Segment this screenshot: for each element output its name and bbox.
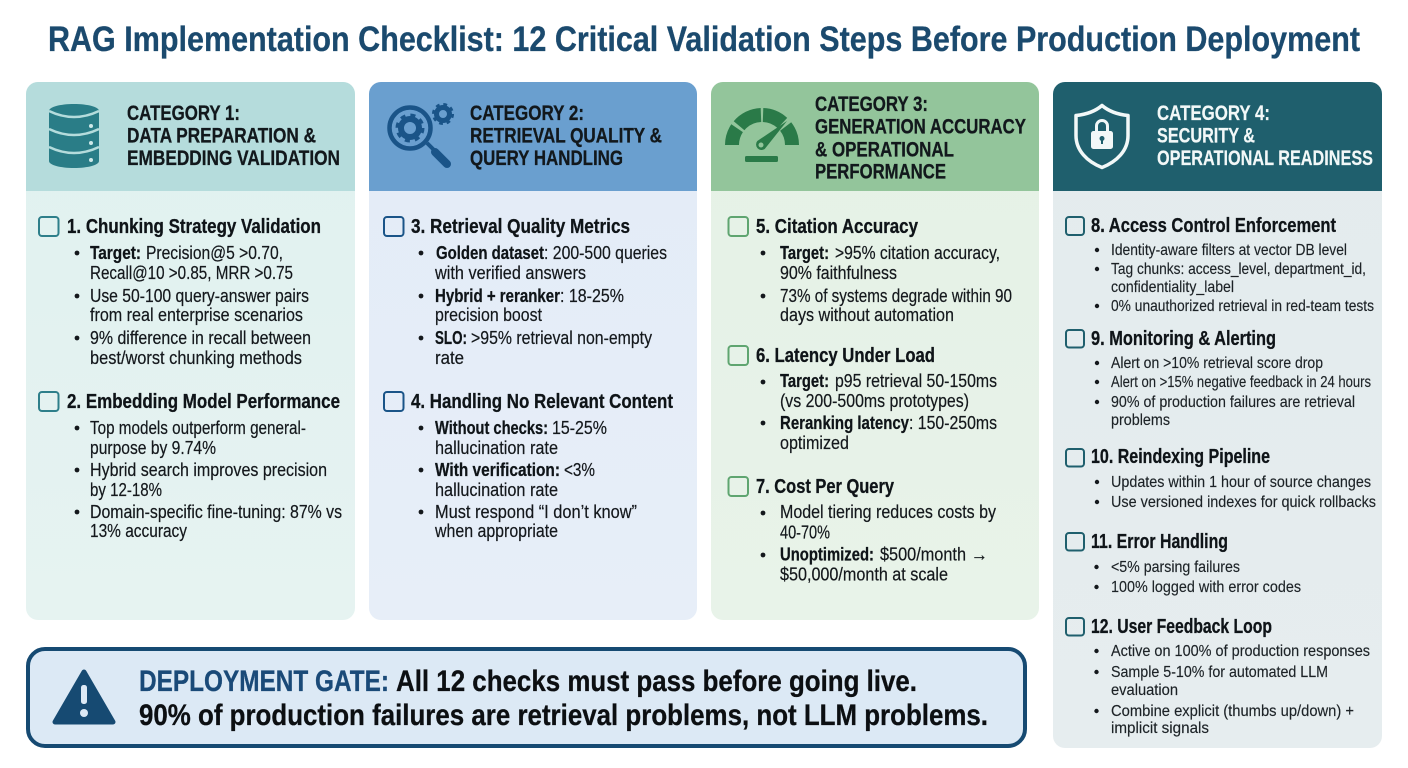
item bullets: : 18-25% — [560, 286, 624, 306]
icon: warning triangle — [55, 672, 113, 722]
item 1 — [39, 216, 321, 368]
item bullets: Reranking latency — [780, 413, 909, 433]
checkbox — [1066, 533, 1084, 550]
item bullets — [1094, 643, 1370, 737]
checkbox — [1066, 217, 1084, 235]
item heading: 2. Embedding Model Performance — [67, 391, 340, 413]
item bullets: precision boost — [435, 305, 542, 325]
callout text — [139, 665, 988, 732]
checkbox — [39, 392, 58, 411]
item bullets — [761, 502, 996, 584]
item 9 — [1066, 328, 1371, 429]
item bullets: Updates within 1 hour of source changes — [1111, 474, 1371, 491]
item bullets — [761, 243, 1012, 325]
item bullets: with verified answers — [434, 263, 586, 283]
item bullets: Target: — [90, 243, 141, 263]
checkbox — [1066, 449, 1084, 466]
item bullets: <5% parsing failures — [1111, 559, 1240, 576]
item bullets: 100% logged with error codes — [1111, 579, 1301, 596]
item bullets: hallucination rate — [435, 438, 558, 458]
item bullets: $50,000/month at scale — [780, 564, 948, 584]
item bullets: : 200-500 queries — [544, 243, 667, 263]
item bullets: rate — [435, 348, 464, 368]
item bullets — [1095, 242, 1374, 315]
item bullets: Sample 5-10% for automated LLM — [1111, 664, 1328, 681]
heading: category 4: SECURITY & — [1157, 124, 1255, 148]
item bullets: SLO: — [435, 328, 467, 348]
heading: category 3: & OPERATIONAL — [815, 138, 954, 162]
item bullets: Domain-specific fine-tuning: 87% vs — [90, 502, 342, 522]
item bullets: >95% citation accuracy, — [835, 243, 1000, 263]
item bullets: 90% faithfulness — [780, 263, 897, 283]
item bullets: → — [971, 544, 988, 564]
heading: category 2: RETRIEVAL QUALITY & — [470, 124, 662, 148]
item bullets: hallucination rate — [435, 480, 558, 500]
item 5 — [728, 216, 1012, 325]
item bullets: by 12-18% — [90, 480, 162, 500]
item 7 — [728, 476, 996, 584]
item bullets: 13% accuracy — [90, 521, 187, 541]
checkbox — [384, 392, 404, 411]
item bullets — [419, 418, 637, 541]
item heading: 5. Citation Accuracy — [756, 216, 919, 238]
item bullets: Active on 100% of production responses — [1111, 643, 1370, 660]
item bullets: 73% of systems degrade within 90 — [780, 286, 1012, 306]
checkbox — [384, 217, 404, 236]
item bullets: Use versioned indexes for quick rollbacks — [1111, 494, 1376, 511]
item 8 — [1066, 215, 1374, 315]
item bullets: <3% — [564, 460, 595, 480]
item bullets: when appropriate — [434, 521, 558, 541]
item 2 — [39, 391, 342, 541]
item bullets: Target: — [780, 371, 829, 391]
item bullets: Model tiering reduces costs by — [780, 502, 996, 522]
heading: category 4: CATEGORY 4: — [1157, 102, 1270, 125]
item bullets — [1094, 559, 1301, 596]
item bullets — [75, 418, 342, 541]
heading: category 1: CATEGORY 1: — [127, 102, 240, 125]
heading: category 1: DATA PREPARATION & — [127, 124, 316, 148]
item bullets: 0% unauthorized retrieval in red-team tests — [1111, 298, 1374, 315]
item 10 — [1066, 446, 1376, 511]
panel: category 2 retrieval quality — [369, 82, 697, 620]
item bullets: With verification: — [435, 460, 560, 480]
icon: magnifier with gears — [390, 104, 453, 164]
checkbox — [1066, 618, 1084, 636]
checkbox — [1066, 330, 1084, 348]
item bullets: implicit signals — [1111, 720, 1209, 737]
heading: category 3: PERFORMANCE — [815, 160, 946, 184]
checkbox — [728, 477, 748, 496]
item bullets: Alert on >10% retrieval score drop — [1111, 355, 1323, 372]
heading: category 1 — [127, 102, 340, 170]
heading: category 4 — [1157, 102, 1373, 170]
item 6 — [728, 345, 997, 453]
item bullets: Hybrid + reranker — [435, 286, 560, 306]
icon: speedometer gauge — [725, 108, 799, 162]
item heading: 11. Error Handling — [1091, 531, 1228, 553]
callout: deployment gate — [28, 649, 1025, 746]
panel: category 3 generation accuracy — [711, 82, 1039, 620]
item bullets: Precision@5 >0.70, — [146, 243, 283, 263]
item heading: 3. Retrieval Quality Metrics — [411, 216, 630, 238]
heading: category 3: CATEGORY 3: — [815, 93, 928, 116]
item bullets: 40-70% — [780, 522, 830, 542]
item bullets — [419, 243, 667, 368]
item heading: 12. User Feedback Loop — [1091, 616, 1272, 638]
item heading: 9. Monitoring & Alerting — [1091, 328, 1276, 350]
heading: category 2: QUERY HANDLING — [470, 147, 623, 170]
item bullets: evaluation — [1111, 682, 1178, 699]
item bullets: Hybrid search improves precision — [90, 460, 327, 480]
item bullets: Unoptimized: — [780, 544, 874, 564]
item bullets: >95% retrieval non-empty — [471, 328, 652, 348]
item bullets — [1095, 355, 1371, 429]
header: category 2 — [369, 82, 697, 191]
item bullets: Identity-aware filters at vector DB level — [1111, 242, 1347, 259]
item 4 — [384, 391, 673, 541]
item bullets: Without checks: — [435, 418, 548, 438]
item bullets: Golden dataset — [436, 243, 544, 263]
item bullets: Target: — [780, 243, 829, 263]
item bullets: 9% difference in recall between — [90, 328, 311, 348]
heading: category 3 — [815, 93, 1026, 184]
header: category 1 — [26, 82, 355, 191]
heading: category 2 — [470, 102, 662, 170]
item bullets: days without automation — [780, 305, 954, 325]
callout text: DEPLOYMENT GATE: — [139, 665, 389, 698]
item bullets — [761, 371, 997, 453]
header: category 3 — [711, 82, 1039, 191]
item 3 — [384, 216, 667, 368]
panel: category 1 data preparation — [26, 82, 355, 620]
item heading: 4. Handling No Relevant Content — [411, 391, 673, 413]
checkbox — [728, 346, 748, 365]
item bullets — [1095, 474, 1376, 511]
callout text: 90% of production failures are retrieval problems, not LLM problems. — [139, 699, 988, 732]
item bullets: Combine explicit (thumbs up/down) + — [1111, 703, 1354, 720]
header: category 4 — [1053, 82, 1382, 191]
item bullets: Top models outperform general- — [90, 418, 306, 438]
item bullets — [75, 243, 311, 368]
heading: category 3: GENERATION ACCURACY — [815, 116, 1026, 138]
item bullets: from real enterprise scenarios — [90, 305, 303, 325]
item heading: 1. Chunking Strategy Validation — [67, 216, 321, 238]
item bullets: 15-25% — [552, 418, 607, 438]
panel: category 4 security — [1053, 82, 1382, 748]
checkbox — [39, 217, 58, 236]
item heading: 10. Reindexing Pipeline — [1091, 446, 1270, 468]
item heading: 8. Access Control Enforcement — [1091, 215, 1336, 237]
callout text: All 12 checks must pass before going live. — [396, 665, 917, 698]
item bullets: 90% of production failures are retrieval — [1111, 394, 1355, 411]
item bullets: $500/month — [880, 544, 966, 564]
item bullets: Use 50-100 query-answer pairs — [90, 286, 309, 306]
item heading: 6. Latency Under Load — [756, 345, 935, 367]
item bullets: : 150-250ms — [909, 413, 997, 433]
item bullets: (vs 200-500ms prototypes) — [780, 391, 969, 411]
item bullets: best/worst chunking methods — [90, 348, 302, 368]
item bullets: problems — [1111, 412, 1170, 429]
checkbox — [728, 217, 748, 236]
item bullets: Recall@10 >0.85, MRR >0.75 — [90, 263, 293, 283]
item bullets: optimized — [780, 433, 849, 453]
item bullets: p95 retrieval 50-150ms — [835, 371, 997, 391]
heading: category 2: CATEGORY 2: — [470, 102, 584, 125]
icon: database — [49, 104, 99, 168]
item bullets: purpose by 9.74% — [90, 438, 216, 458]
item heading: 7. Cost Per Query — [756, 476, 895, 498]
item bullets: confidentiality_label — [1111, 279, 1234, 296]
item bullets: Tag chunks: access_level, department_id, — [1111, 261, 1366, 278]
heading: category 1: EMBEDDING VALIDATION — [127, 147, 340, 170]
item 12 — [1066, 616, 1370, 737]
item bullets: Must respond “I don’t know” — [435, 502, 637, 522]
icon: shield with padlock — [1076, 106, 1128, 168]
item 11 — [1066, 531, 1301, 596]
